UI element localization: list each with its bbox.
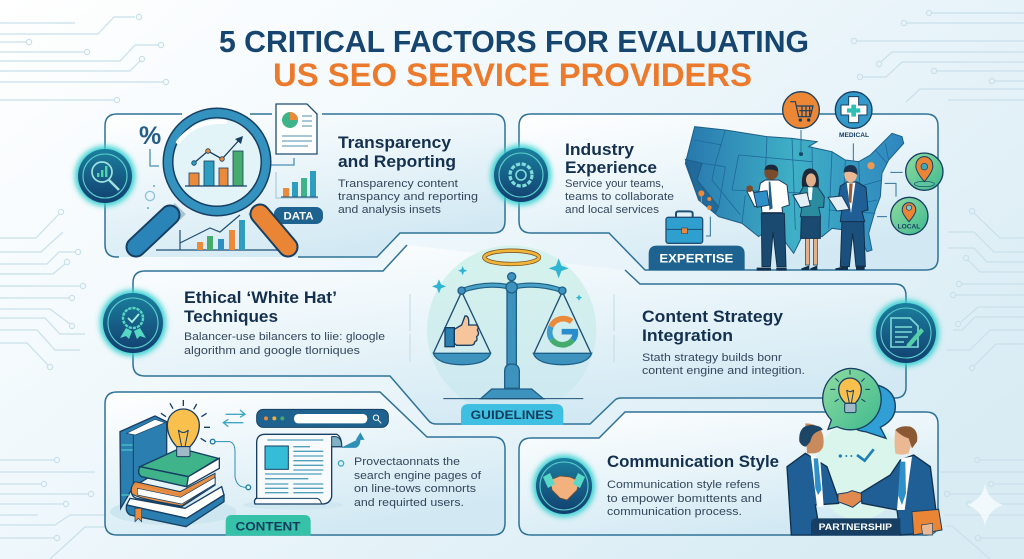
icon badge: document and pencil [873, 300, 939, 366]
heading line: techniques: Techniques [184, 307, 278, 326]
arrow: scroll up [342, 433, 364, 447]
label pill: guidelines [461, 404, 563, 425]
heading: industry experience [565, 140, 657, 177]
body: content strategy [642, 352, 805, 377]
icon: halo [484, 251, 539, 264]
person: woman with tablet [793, 168, 824, 270]
decorative sparkle [967, 484, 1003, 526]
illustration: scales of justice [427, 245, 596, 425]
body: industry: teams to collaborate [565, 191, 674, 203]
icon badge: magnifier analytics [75, 146, 135, 206]
label pill: partnership: PARTNERSHIP [819, 522, 892, 532]
icon: speech bubble green with bulb [823, 368, 881, 430]
label pill: data: DATA [284, 210, 314, 222]
body: content strategy: Stath strategy builds bonr [642, 352, 782, 364]
icon: briefcase [666, 211, 703, 243]
body: transparency: and analysis insets [338, 204, 442, 216]
body: content strategy: content engine and integition. [642, 365, 805, 377]
icon: map pins [698, 130, 903, 236]
icon: browser search bar [257, 409, 388, 427]
body: content: on line-tows comnorts [354, 483, 477, 495]
body: content: search engine pages of [354, 470, 482, 482]
illustration: mint backdrop [815, 420, 902, 520]
label pill: data [274, 207, 323, 224]
title [219, 24, 809, 93]
icon: document scroll [243, 434, 343, 510]
heading line: integration: Integration [642, 326, 733, 345]
heading: transparency and reporting: and Reporting [338, 152, 456, 171]
label pill: expertise [649, 246, 745, 270]
icon: check mark [839, 449, 874, 461]
icon: light bulb [161, 400, 210, 457]
body: communication: communication process. [607, 506, 742, 518]
label pill: guidelines: GUIDELINES [471, 408, 553, 422]
heading: industry experience: Industry [565, 140, 635, 159]
icon: local pin badge: LOCAL [898, 223, 920, 230]
icon: google G [550, 319, 575, 345]
title line 2: US SEO SERVICE PROVIDERS [273, 57, 752, 93]
body: industry [565, 178, 674, 216]
icon: speech bubble blue [845, 383, 895, 438]
icon: percent sign: % [139, 122, 161, 150]
icon: magnifying glass [136, 113, 288, 247]
connector: bulb to page [210, 439, 251, 490]
icon: medical badge [835, 92, 872, 128]
label pill: expertise: EXPERTISE [659, 252, 733, 266]
icon badge: gear [491, 145, 551, 205]
icon: location pin badge [906, 153, 943, 190]
body: industry: Service your teams, [565, 178, 664, 190]
body: content: Provectaonnats the [354, 456, 460, 468]
body: industry: and local services [565, 204, 660, 216]
icon: handshake [838, 491, 861, 507]
person: man in blue suit [828, 165, 868, 270]
body: content [354, 456, 482, 509]
person: right businessman [860, 426, 942, 535]
icon badge: handshake [533, 455, 595, 517]
heading: content strategy: Content Strategy [642, 307, 784, 326]
title line 1: 5 CRITICAL FACTORS FOR EVALUATING [219, 24, 809, 59]
chart: small bars [276, 171, 318, 198]
person: man with tablet [746, 165, 789, 270]
body: communication: to empower bomıttents and [607, 493, 762, 505]
body: ethical: Balancer-use bilancers to liie: gloogle [184, 331, 385, 343]
icon: thumbs up [445, 316, 479, 347]
body: communication [607, 479, 762, 518]
panel: transparency and reporting [105, 104, 505, 257]
label pill: partnership [811, 518, 900, 536]
heading: transparency and reporting [338, 133, 456, 171]
icon badge: award ribbon [100, 290, 166, 356]
heading: transparency and reporting: Transparency [338, 133, 452, 152]
panel: industry experience [519, 92, 943, 270]
icon: arrows [223, 410, 245, 427]
body: transparency: transpancy and reporting [338, 191, 478, 203]
icon: book stack [110, 416, 237, 527]
map: united states [685, 127, 904, 253]
body: ethical: algorithm and google tlorniques [184, 345, 361, 357]
label pill: content: CONTENT [235, 519, 301, 533]
heading: communication style: Communication Style [607, 452, 779, 471]
icon: report document [276, 104, 317, 154]
chart: lower trend bars [156, 215, 280, 250]
heading: industry experience: Experience [565, 158, 657, 177]
body: transparency: Transparency content [338, 178, 458, 190]
icon: local pin badge [891, 197, 928, 235]
panel: communication style [519, 368, 942, 536]
label: medical: MEDICAL [839, 132, 869, 139]
heading: ethical white hat: Ethical ‘White Hat’ [184, 288, 337, 307]
label pill: content [226, 515, 311, 536]
body: transparency [338, 178, 478, 216]
icon: shopping cart badge [783, 92, 819, 128]
panel: content [105, 392, 505, 536]
body: content: and requirted users. [354, 497, 464, 509]
person: left businessman [787, 423, 839, 535]
panel: ethical white hat and content strategy [133, 245, 906, 424]
body: ethical [184, 331, 385, 357]
body: communication: Communication style refens [607, 479, 761, 491]
